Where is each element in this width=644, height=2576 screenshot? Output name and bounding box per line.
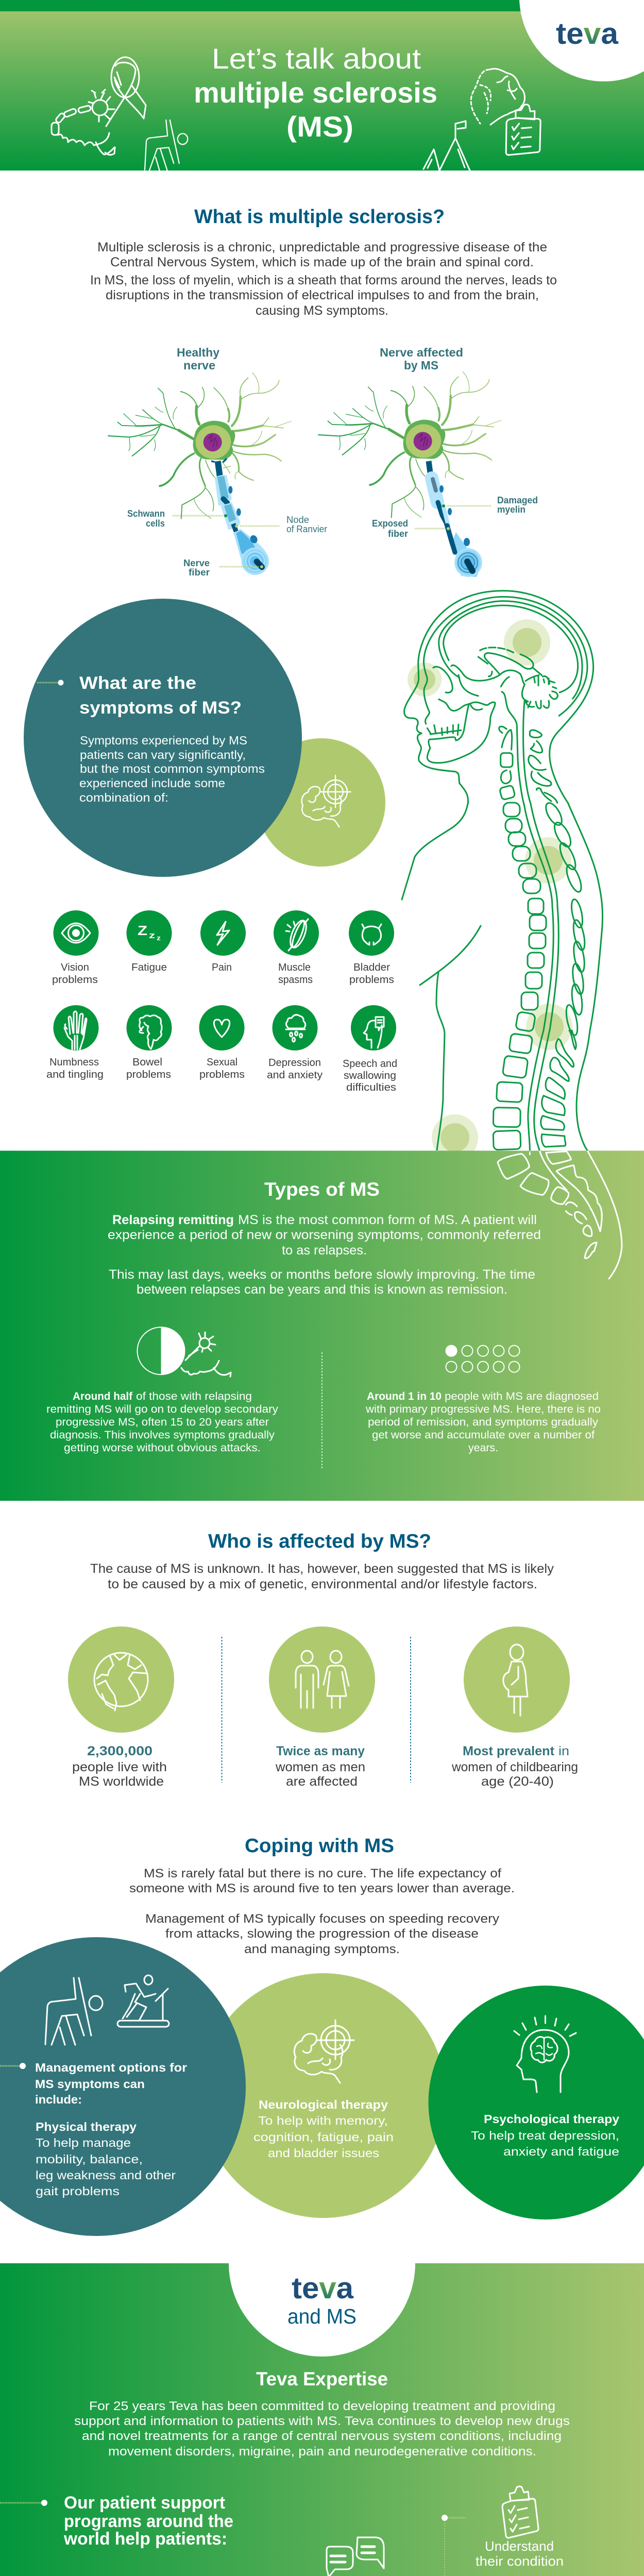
symptom: fatigue xyxy=(127,910,172,973)
item: understand condition: Understand xyxy=(485,2538,554,2554)
panel: types of MS xyxy=(0,1151,644,1501)
subheading: patient support: Our patient support xyxy=(64,2493,225,2513)
symptom: speech and swallowing difficulties xyxy=(343,1005,397,1093)
icon: half circle with nerve xyxy=(137,1327,231,1377)
heading xyxy=(79,673,242,718)
label: nerve affected by MS xyxy=(380,346,463,372)
white circle with logo xyxy=(229,2263,415,2357)
symptom: vision problems xyxy=(52,910,99,986)
text: around half: remitting MS will go on to develop secondary xyxy=(46,1403,279,1415)
stat: childbearing age xyxy=(451,1626,578,1789)
subheading: patient support: world help patients: xyxy=(63,2529,227,2549)
panel: physical therapy: include: xyxy=(35,2093,82,2106)
stat: women vs men: women as men xyxy=(275,1760,365,1774)
icon: clipboard xyxy=(502,102,546,159)
text: around half: getting worse without obvious attacks. xyxy=(64,1442,261,1454)
heading: Types of MS xyxy=(264,1179,380,1200)
divider xyxy=(222,1637,223,1783)
label: nerve affected by MS: by MS xyxy=(404,359,438,372)
stat: women vs men: Twice as many xyxy=(276,1744,365,1758)
paragraph xyxy=(90,240,557,318)
text: patients can vary significantly, xyxy=(80,748,246,761)
text: around 1 in 10: with primary progressive MS. Here, there is no xyxy=(365,1403,601,1415)
symptom: bladder problems: Bladder xyxy=(353,962,390,973)
symptom: fatigue: Fatigue xyxy=(131,962,167,973)
callout: Schwann cells xyxy=(127,509,227,529)
label: healthy nerve xyxy=(177,346,219,372)
panel: neurological therapy: and bladder issues xyxy=(268,2146,379,2160)
stat: worldwide: 2,300,000 xyxy=(87,1744,152,1758)
paragraph: and managing symptoms. xyxy=(244,1942,400,1956)
callout: Schwann cells: cells xyxy=(146,518,165,529)
panel: physical therapy xyxy=(0,1937,246,2236)
paragraph xyxy=(90,1562,554,1591)
divider xyxy=(321,1352,323,1470)
section: who is affected xyxy=(68,1531,578,1789)
symptom: pain: Pain xyxy=(212,962,232,973)
paragraph: and novel treatments for a range of central nervous system conditions, including xyxy=(82,2429,562,2443)
symptom: fatigue: z xyxy=(157,934,161,942)
section: what is multiple sclerosis xyxy=(90,206,557,318)
text: around half: progressive MS, often 15 to 20 years after xyxy=(56,1416,269,1428)
damaged axon xyxy=(429,461,482,577)
section: symptoms circles xyxy=(24,599,385,877)
subheading: patient support: programs around the xyxy=(64,2512,233,2531)
diagram: healthy nerve xyxy=(108,346,327,578)
heading: Teva Expertise xyxy=(256,2368,388,2389)
symptom: bladder problems: problems xyxy=(349,974,394,986)
timeline connector xyxy=(425,2515,466,2576)
callout: Exposed fiber xyxy=(372,518,450,539)
paragraph: The cause of MS is unknown. It has, however, been suggested that MS is likely xyxy=(90,1562,554,1576)
label: healthy nerve: Healthy xyxy=(177,346,219,359)
callout: Exposed fiber: fiber xyxy=(388,529,408,539)
icon: physiotherapy xyxy=(145,120,188,170)
stat: childbearing age: in xyxy=(558,1744,569,1758)
symptom: muscle spasms: Muscle xyxy=(278,962,311,973)
paragraph: Management of MS typically focuses on speeding recovery xyxy=(145,1912,499,1926)
symptom: bowel problems: problems xyxy=(126,1069,171,1080)
title: multiple sclerosis xyxy=(194,76,437,109)
paragraph: support and information to patients with MS. Teva continues to develop new drugs xyxy=(74,2414,570,2428)
text: around 1 in 10: period of remission, and symptoms gradually xyxy=(368,1416,599,1428)
panel: neurological therapy xyxy=(201,1973,446,2218)
panel: physical therapy: Physical therapy xyxy=(36,2120,137,2133)
heading: What are the xyxy=(79,673,196,693)
highlights and skeleton illustration xyxy=(402,591,622,1279)
teva logo: teva xyxy=(556,17,619,50)
panel: physical therapy: mobility, balance, xyxy=(36,2153,143,2166)
icon: brain xyxy=(471,69,524,125)
symptom: bowel problems xyxy=(126,1005,172,1080)
symptom: bowel problems: Bowel xyxy=(132,1057,162,1068)
text: but the most common symptoms xyxy=(80,762,265,775)
callout: Node of Ranvier: of Ranvier xyxy=(286,524,327,534)
symptom: depression and anxiety: and anxiety xyxy=(267,1070,323,1081)
callout: Nerve fiber: fiber xyxy=(189,567,210,578)
paragraph: between relapses can be years and this is known as remission. xyxy=(137,1282,507,1297)
text xyxy=(79,734,265,804)
stat: women vs men xyxy=(269,1626,375,1789)
callout: Damaged myelin xyxy=(442,495,538,515)
paragraph xyxy=(108,1213,541,1297)
paragraph: to as relapses. xyxy=(282,1243,367,1258)
symptom: bladder problems xyxy=(349,910,394,986)
symptom icons grid xyxy=(46,910,397,1093)
paragraph: causing MS symptoms. xyxy=(256,303,388,318)
white circle with logo: teva xyxy=(292,2272,354,2305)
paragraph xyxy=(129,1867,515,1956)
heading: Who is affected by MS? xyxy=(208,1531,431,1552)
label: healthy nerve: nerve xyxy=(183,359,215,372)
text: around half: diagnosis. This involves symptoms gradually xyxy=(50,1429,275,1441)
symptom: speech and swallowing difficulties: swallowing xyxy=(344,1070,396,1081)
heading: What is multiple sclerosis? xyxy=(194,206,445,228)
stat: worldwide: people live with xyxy=(72,1760,167,1774)
icon: damaged nerve chain xyxy=(52,90,115,155)
text: around half xyxy=(46,1391,279,1454)
symptom: muscle spasms: spasms xyxy=(278,974,313,986)
white circle with logo: and MS xyxy=(287,2304,357,2328)
panel: teva and MS xyxy=(0,2263,644,2576)
paragraph: For 25 years Teva has been committed to developing treatment and providing xyxy=(89,2399,555,2413)
symptom: vision problems: problems xyxy=(52,974,98,986)
symptom: pain xyxy=(200,910,246,973)
symptom: depression and anxiety xyxy=(267,1005,323,1081)
panel: physical therapy: To help manage xyxy=(36,2136,131,2149)
symptom: sexual problems xyxy=(199,1005,245,1080)
paragraph: disruptions in the transmission of electrical impulses to and from the brain, xyxy=(106,288,539,302)
heading: symptoms of MS? xyxy=(79,698,242,718)
item: understand condition: their condition xyxy=(476,2553,564,2569)
diagram: nerve affected by MS xyxy=(318,346,538,577)
callout: Nerve fiber xyxy=(183,558,263,578)
callout: Damaged myelin: Damaged xyxy=(497,495,538,505)
teal circle panel xyxy=(24,599,302,877)
paragraph: from attacks, slowing the progression of the disease xyxy=(165,1927,479,1941)
title xyxy=(194,42,437,143)
text: combination of: xyxy=(79,791,168,804)
paragraph: Relapsing remitting xyxy=(112,1213,234,1227)
panel: psychological therapy: Psychological therapy xyxy=(484,2112,619,2126)
callout: Node of Ranvier: Node xyxy=(286,515,309,525)
text: around half: of those with relapsing xyxy=(136,1391,252,1402)
symptom: speech and swallowing difficulties: difficulties xyxy=(346,1082,396,1093)
paragraph: MS is the most common form of MS. A patient will xyxy=(238,1213,537,1227)
symptom: numbness and tingling: and tingling xyxy=(46,1069,104,1080)
symptom: muscle spasms xyxy=(274,910,319,986)
divider xyxy=(410,1637,411,1783)
paragraph: Central Nervous System, which is made up of the brain and spinal cord. xyxy=(110,255,534,269)
paragraph: to be caused by a mix of genetic, environmental and/or lifestyle factors. xyxy=(108,1577,537,1591)
paragraph: Multiple sclerosis is a chronic, unpredictable and progressive disease of the xyxy=(97,240,547,255)
panel: physical therapy: Management options for xyxy=(35,2061,187,2074)
skeleton base in white xyxy=(436,1151,622,1280)
olive circle with brain icon xyxy=(257,738,385,867)
panel: physical therapy: gait problems xyxy=(36,2184,120,2198)
text: Symptoms experienced by MS xyxy=(80,734,247,747)
title: (MS) xyxy=(286,110,353,143)
affected neuron cell body and dendrites xyxy=(318,371,501,518)
text: around 1 in 10: years. xyxy=(468,1442,498,1454)
text: around 1 in 10: Around 1 in 10 xyxy=(367,1391,442,1402)
label: nerve affected by MS: Nerve affected xyxy=(380,346,463,359)
panel: psychological therapy xyxy=(429,1986,644,2219)
paragraph xyxy=(74,2399,570,2459)
white logo circle xyxy=(519,0,644,81)
callout: Nerve fiber: Nerve xyxy=(183,558,210,568)
icon: mountains with flag xyxy=(423,121,470,171)
symptom: depression and anxiety: Depression xyxy=(268,1057,321,1069)
icon: ribbon xyxy=(106,57,146,126)
heading: Coping with MS xyxy=(245,1835,394,1857)
symptom: fatigue: Z xyxy=(138,923,147,938)
item: understand condition xyxy=(476,2486,564,2569)
panel: neurological therapy: Neurological therapy xyxy=(259,2098,388,2111)
symptom: vision problems: Vision xyxy=(61,962,89,973)
text: around 1 in 10: get worse and accumulate over a number of xyxy=(372,1429,595,1441)
paragraph: movement disorders, migraine, pain and neurodegenerative conditions. xyxy=(108,2445,536,2459)
stat: childbearing age: age (20-40) xyxy=(481,1774,554,1789)
item: interact with others xyxy=(297,2537,414,2576)
stat: women vs men: are affected xyxy=(286,1774,358,1789)
panel: physical therapy: MS symptoms can xyxy=(35,2077,145,2091)
stat: worldwide xyxy=(68,1626,174,1789)
symptom: numbness and tingling xyxy=(46,1005,104,1080)
callout: Exposed fiber: Exposed xyxy=(372,518,408,529)
panel: neurological therapy: cognition, fatigue, pain xyxy=(253,2130,394,2144)
stat: worldwide: MS worldwide xyxy=(79,1774,164,1789)
panel: psychological therapy: anxiety and fatigue xyxy=(503,2145,619,2158)
callout: Schwann cells: Schwann xyxy=(127,509,165,519)
paragraph: This may last days, weeks or months before slowly improving. The time xyxy=(109,1267,535,1282)
text: around half: Around half xyxy=(73,1391,133,1402)
panel: physical therapy: leg weakness and other xyxy=(36,2168,176,2182)
stat: childbearing age: Most prevalent xyxy=(463,1744,555,1758)
symptom: fatigue: z xyxy=(149,930,155,940)
paragraph: MS is rarely fatal but there is no cure. The life expectancy of xyxy=(144,1867,501,1880)
panel: psychological therapy: To help treat depression, xyxy=(471,2129,619,2142)
axon with myelin xyxy=(211,459,269,575)
symptom: numbness and tingling: Numbness xyxy=(49,1057,99,1068)
icon: treadmill xyxy=(117,1975,169,2027)
symptom: sexual problems: Sexual xyxy=(207,1057,238,1068)
neuron cell body and dendrites xyxy=(108,372,291,519)
text: around 1 in 10 xyxy=(365,1391,601,1454)
paragraph: someone with MS is around five to ten years lower than average. xyxy=(129,1882,515,1895)
symptom: speech and swallowing difficulties: Speech and xyxy=(343,1058,397,1070)
text: experienced include some xyxy=(79,776,225,790)
section: coping with MS xyxy=(0,1835,644,2236)
panel: neurological therapy: To help with memory, xyxy=(258,2114,388,2127)
subheading: patient support xyxy=(0,2493,233,2549)
paragraph: experience a period of new or worsening symptoms, commonly referred xyxy=(108,1228,541,1242)
title: Let’s talk about xyxy=(212,42,421,75)
callout: Damaged myelin: myelin xyxy=(497,504,526,515)
header banner xyxy=(0,0,644,171)
text: around 1 in 10: people with MS are diagnosed xyxy=(445,1391,599,1402)
paragraph: In MS, the loss of myelin, which is a sheath that forms around the nerves, leads to xyxy=(90,273,557,287)
icon: one in ten circles xyxy=(446,1346,519,1372)
stat: childbearing age: women of childbearing xyxy=(451,1760,578,1774)
symptom: sexual problems: problems xyxy=(199,1069,245,1080)
callout: Node of Ranvier xyxy=(235,515,327,534)
